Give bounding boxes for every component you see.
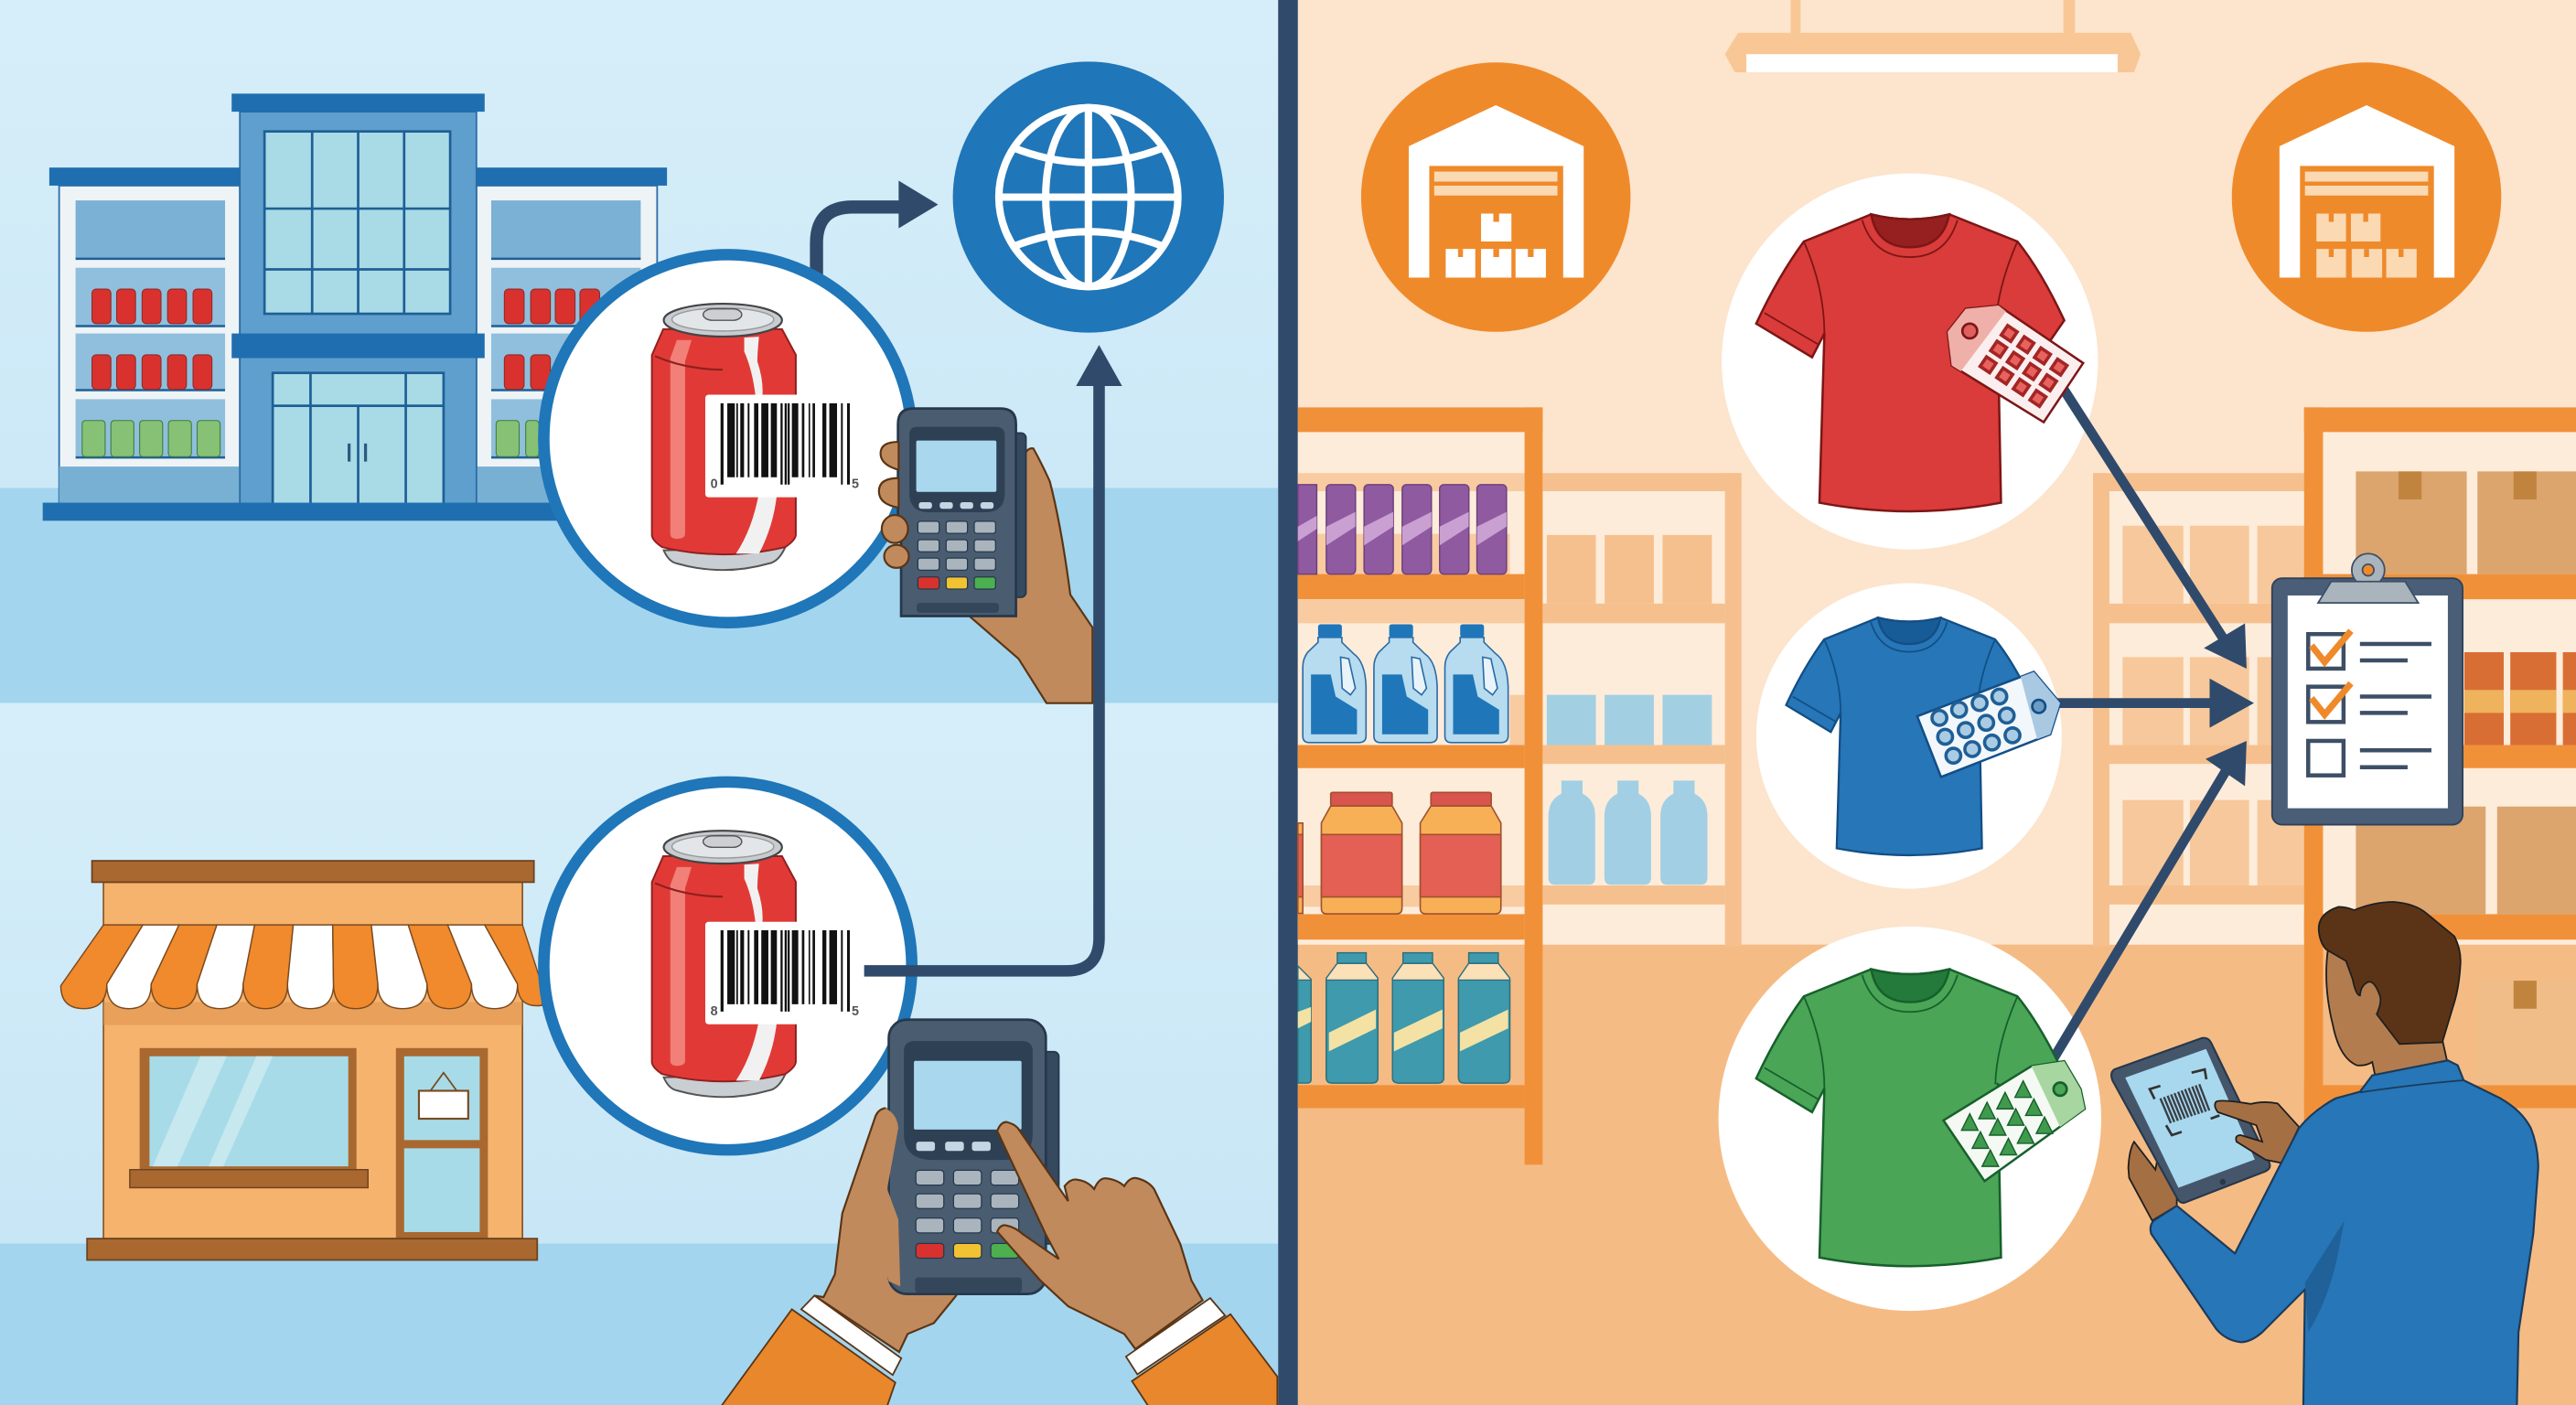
teal bottles — [1298, 953, 1509, 1083]
icon: small storefront — [60, 861, 542, 1260]
warehouse shelving: front left unit with products — [1298, 407, 1542, 1164]
shirt — [1756, 970, 2065, 1266]
tag — [1917, 672, 2060, 777]
door with sign — [396, 1048, 488, 1239]
icon: soda can with barcode: 0 — [711, 477, 718, 491]
divider between panels — [1278, 0, 1298, 1405]
shop window — [130, 1048, 368, 1187]
centre tower — [231, 93, 485, 504]
panel: right warehouse background — [1298, 0, 2576, 1405]
red t-shirt with tag — [1756, 214, 2083, 511]
icon: globe — [953, 61, 1224, 333]
arrow: red tag to checklist — [2065, 391, 2247, 669]
arrow: green tag to checklist — [2052, 741, 2247, 1061]
shirt cuffs — [801, 1295, 1225, 1375]
base — [87, 1239, 537, 1260]
icon: soda can with barcode: 5 — [852, 1004, 859, 1019]
icon: soda can with barcode — [652, 304, 859, 570]
check items — [2308, 634, 2431, 776]
neck and face — [2326, 949, 2448, 1078]
boxes — [1445, 213, 1546, 278]
tag — [1944, 1061, 2085, 1181]
orange goods — [2464, 652, 2576, 745]
right hand — [997, 1122, 1203, 1349]
left hand — [814, 1109, 956, 1352]
fingers — [879, 442, 909, 568]
terminal — [889, 1020, 1058, 1294]
icon: soda can with barcode — [652, 831, 859, 1097]
terminal — [898, 409, 1026, 616]
arrow: blue tag to checklist — [2054, 679, 2254, 728]
ceiling lamp — [1725, 0, 2141, 72]
hair — [2319, 902, 2461, 1044]
icon: clipboard checklist — [2272, 553, 2463, 825]
cornice — [92, 861, 534, 882]
left thumb over terminal edge — [871, 1109, 900, 1286]
awning — [60, 925, 542, 1009]
left hand — [2129, 1142, 2177, 1220]
panel: left blue background — [0, 0, 1278, 1405]
on-screen barcode — [2161, 1084, 2209, 1123]
icon: soda can with barcode: 5 — [852, 477, 859, 491]
blue detergent jugs — [1303, 624, 1508, 743]
white circle: red shirt — [1722, 173, 2098, 550]
icon: soda can with barcode: 8 — [711, 1004, 718, 1019]
blue shirt body — [2151, 1060, 2538, 1405]
worker scanning with tablet — [2111, 902, 2538, 1405]
tablet — [2111, 1038, 2270, 1203]
shirt — [1787, 617, 2033, 855]
tag — [1948, 306, 2083, 423]
right wing — [477, 167, 667, 504]
hand holding scanner terminal — [879, 409, 1092, 703]
building base — [43, 503, 568, 520]
right hand — [2215, 1100, 2299, 1164]
shirt — [1756, 214, 2065, 511]
palm and thumb — [970, 448, 1092, 703]
warehouse shelving: back left unit — [1542, 473, 1742, 946]
jars — [1298, 792, 1501, 914]
boxes — [2316, 213, 2417, 278]
orange sleeves — [721, 1309, 1277, 1405]
icon: large retail building — [43, 93, 667, 520]
warehouse shelving: front right unit with boxes — [2304, 407, 2576, 1133]
icon: warehouse right — [2232, 62, 2501, 332]
left wing — [49, 167, 240, 504]
clip — [2318, 553, 2419, 603]
hands using payment terminal — [721, 1020, 1277, 1405]
purple cans — [1298, 485, 1507, 574]
warehouse shelving: back right unit — [2093, 473, 2306, 946]
white circle: blue shirt — [1756, 584, 2062, 889]
white circle: green shirt — [1719, 927, 2101, 1311]
cardboard boxes — [2356, 471, 2576, 1085]
arrow: barcode data up to globe — [864, 345, 1122, 971]
magnifier circle: can with barcode, large store — [543, 254, 912, 623]
magnifier circle: can with barcode, small store — [543, 782, 912, 1150]
arrow: curved arrow to globe — [817, 181, 938, 276]
blue t-shirt with tag — [1787, 617, 2060, 855]
green t-shirt with tag — [1756, 970, 2085, 1266]
icon: warehouse left — [1361, 62, 1630, 332]
